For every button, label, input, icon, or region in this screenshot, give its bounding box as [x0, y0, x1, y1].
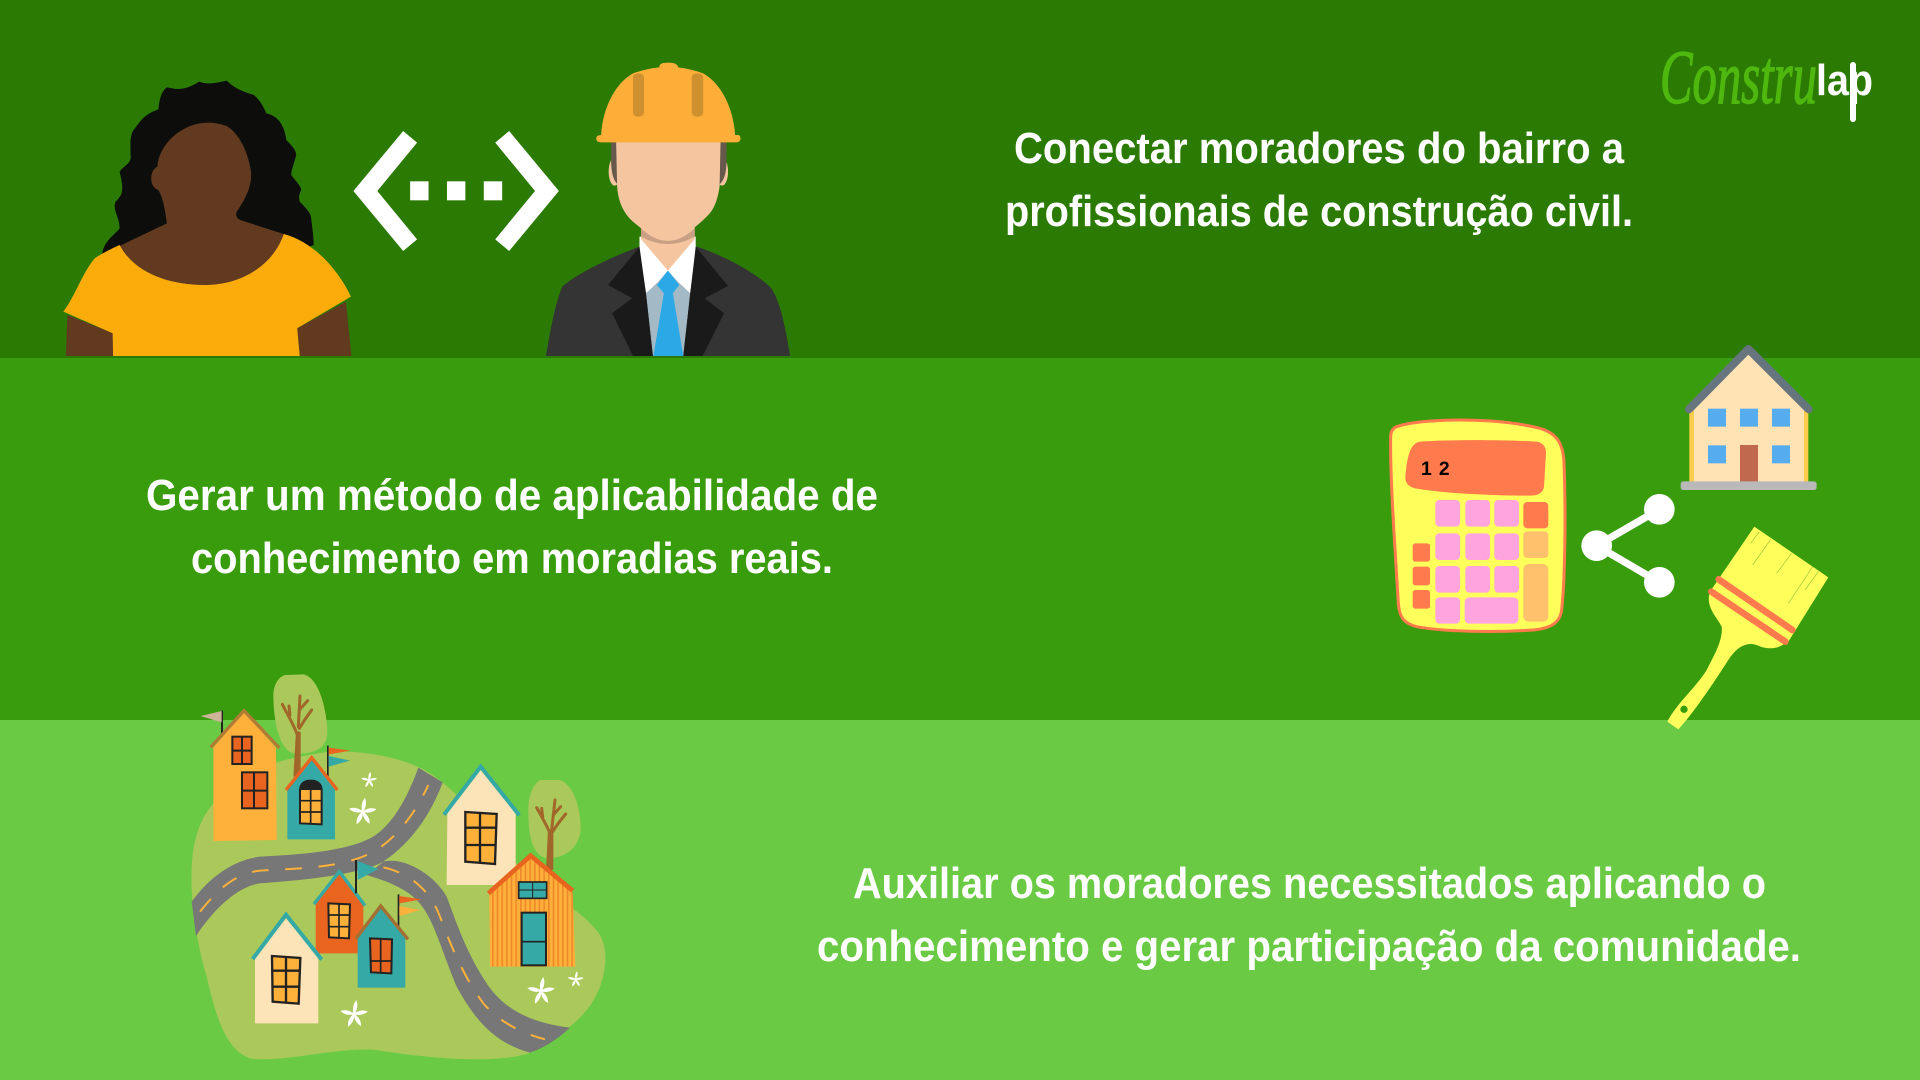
logo: Construlap: Constru: [1660, 36, 1817, 120]
icon: house: [1681, 349, 1817, 490]
icon: connection arrows: [353, 131, 559, 251]
heading: third objective: Auxiliar os moradores necessitados aplicando o: [853, 859, 1766, 908]
house: teal arched: [286, 746, 351, 839]
panel: bottom band: [0, 720, 1920, 1080]
logo: Construlap: lap: [1816, 56, 1873, 105]
heading: third objective: conhecimento e gerar participação da comunidade.: [817, 922, 1801, 971]
house: red centre: [314, 860, 378, 953]
heading: first objective: Conectar moradores do bairro a: [1014, 124, 1624, 173]
heading: first objective: [1005, 124, 1633, 236]
house: striped orange: [488, 856, 575, 967]
illustration: neighbourhood map: [191, 674, 605, 1059]
icon: calculator: [1391, 420, 1565, 631]
icon: share: [1581, 494, 1675, 598]
house: tall orange: [201, 711, 279, 841]
heading: first objective: profissionais de construção civil.: [1005, 187, 1633, 236]
house: cream top right: [444, 767, 519, 885]
road: [192, 768, 570, 1053]
house: cream bottom left: [253, 915, 322, 1023]
panel: top band: [0, 0, 1920, 358]
heading: second objective: [146, 471, 878, 583]
heading: second objective: conhecimento em moradias reais.: [191, 534, 833, 583]
icon: paint brush: [1667, 527, 1828, 729]
heading: second objective: Gerar um método de aplicabilidade de: [146, 471, 878, 520]
panel: middle band: [0, 358, 1920, 720]
heading: third objective: [817, 859, 1801, 971]
icon: calculator: 12: [1421, 459, 1450, 480]
ground: [191, 751, 605, 1059]
flowers: [340, 772, 584, 1027]
icon: resident woman: [63, 81, 351, 356]
trees: [273, 674, 581, 870]
house: teal centre: [356, 894, 422, 988]
icon: construction professional: [546, 63, 790, 356]
